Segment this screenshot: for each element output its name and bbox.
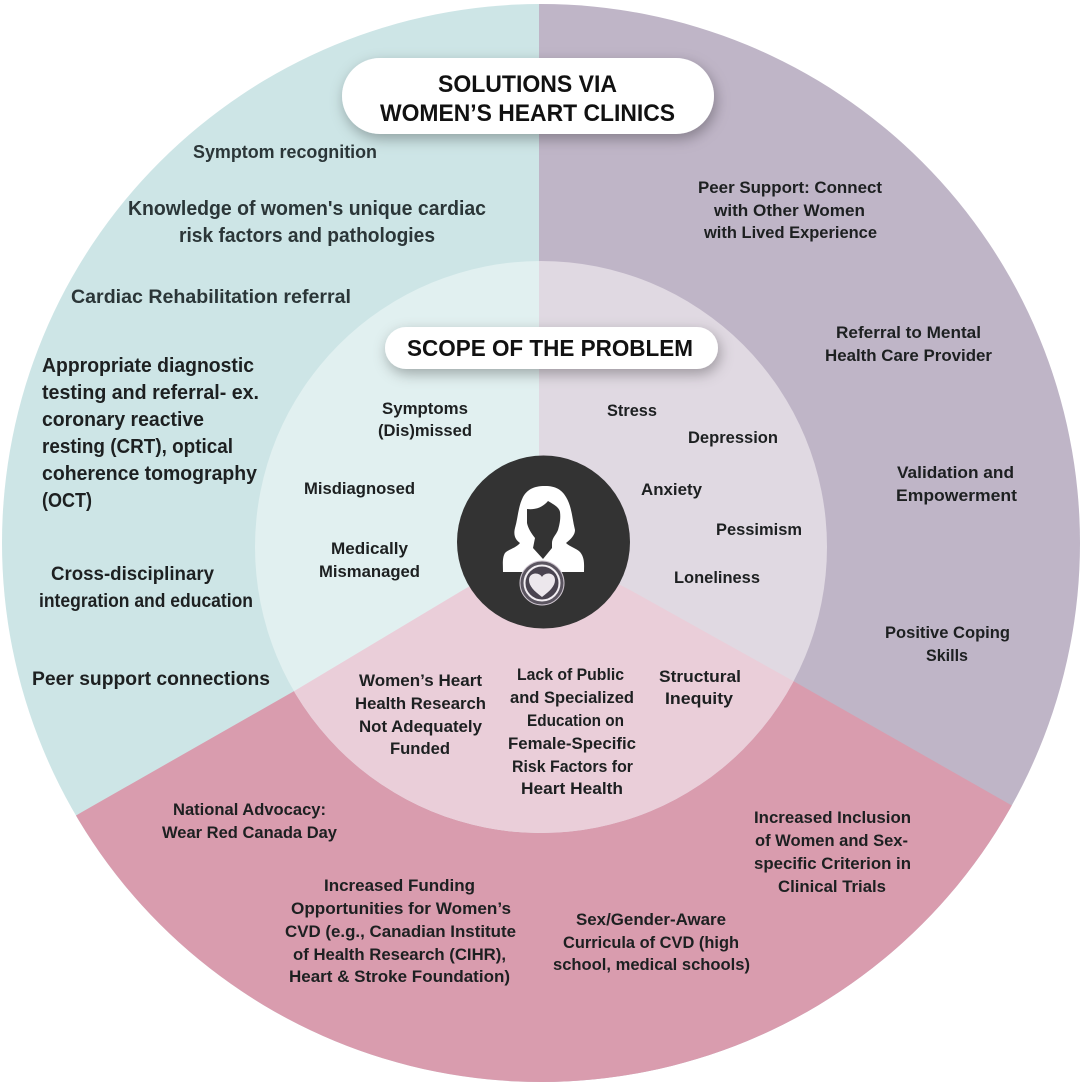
text: anxiety: Anxiety: [641, 481, 703, 499]
text: validation and empowerment: [896, 463, 1017, 505]
text: appropriate diagnostic testing: (OCT): [42, 490, 92, 512]
text: depression: Depression: [688, 429, 778, 447]
text: increased inclusion in clinical trials: of Women and Sex-: [755, 832, 908, 850]
text: appropriate diagnostic testing: Appropriate diagnostic: [42, 355, 254, 377]
icon: woman silhouette: [503, 486, 584, 572]
text: sex/gender-aware curricula: [553, 911, 750, 974]
text: loneliness: Loneliness: [674, 569, 760, 587]
text: lack of public and specialized education: Education on: [527, 712, 624, 730]
text: medically mismanaged: Mismanaged: [319, 563, 420, 581]
text: misdiagnosed: Misdiagnosed: [304, 480, 415, 498]
icon: heart badge: [520, 561, 564, 605]
text: research not adequately funded: Funded: [390, 740, 450, 758]
text: peer support lived experience: [698, 178, 882, 242]
text: pessimism: Pessimism: [716, 521, 802, 539]
text: symptoms dismissed: [378, 400, 472, 440]
icon: woman with heart badge: [457, 456, 630, 628]
text: lack of public and specialized education: Heart Health: [521, 780, 623, 798]
text: increased funding opportunities: Increased Funding: [324, 877, 475, 895]
panel: inner pink sector: [294, 584, 794, 833]
text: cross-disciplinary integration: [39, 564, 253, 612]
heading pill: scope of the problem: [385, 327, 718, 369]
heading pill: solutions via women's heart clinics: [342, 58, 714, 134]
text: research not adequately funded: Not Adequately: [359, 718, 483, 736]
text: increased funding opportunities: of Health Research (CIHR),: [293, 946, 506, 964]
panel: inner scope ring: [250, 255, 835, 840]
icon: face cutout: [527, 501, 560, 559]
text: national advocacy: [162, 801, 338, 842]
text: appropriate diagnostic testing: testing and referral- ex.: [42, 382, 259, 404]
text: medically mismanaged: Medically: [331, 540, 409, 558]
panel: outer teal medical sector: [0, 0, 539, 1085]
text: validation and empowerment: Empowerment: [896, 486, 1017, 505]
text: positive coping skills: Skills: [926, 646, 968, 665]
panel: inner purple sector: [539, 255, 832, 840]
text: peer support lived experience: with Other Women: [713, 201, 865, 220]
panel: inner teal sector: [250, 255, 539, 840]
text: positive coping skills: [885, 623, 1010, 665]
text: peer support lived experience: Peer Support: Connect: [698, 178, 882, 197]
text: peer support connections: Peer support connections: [32, 668, 270, 690]
text: symptom recognition: Symptom recognition: [193, 142, 377, 162]
text: lack of public and specialized education: and Specialized: [510, 689, 634, 707]
text: national advocacy: National Advocacy:: [173, 801, 326, 819]
text: increased funding opportunities: [285, 877, 516, 986]
text: referral to mental health: Referral to Mental: [836, 323, 981, 342]
text: appropriate diagnostic testing: [42, 355, 259, 512]
text: increased funding opportunities: Opportunities for Women’s: [291, 900, 511, 918]
text: increased inclusion in clinical trials: Increased Inclusion: [754, 809, 911, 827]
text: research not adequately funded: Health Research: [355, 695, 486, 713]
heading pill: solutions via women's heart clinics: SOLUTIONS VIA: [438, 71, 617, 98]
text: knowledge of unique risk factors: [128, 198, 486, 247]
text: research not adequately funded: [355, 672, 486, 758]
text: structural inequity: [659, 668, 741, 708]
text: increased funding opportunities: Heart & Stroke Foundation): [289, 968, 510, 986]
text: sex/gender-aware curricula: Sex/Gender-Aware: [576, 911, 726, 929]
text: appropriate diagnostic testing: resting (CRT), optical: [42, 436, 233, 458]
text: cross-disciplinary integration: integration and education: [39, 591, 253, 612]
text: sex/gender-aware curricula: Curricula of CVD (high: [563, 934, 739, 952]
text: referral to mental health: Health Care Provider: [825, 346, 992, 365]
text: increased funding opportunities: CVD (e.g., Canadian Institute: [285, 923, 516, 941]
heading pill: solutions via women's heart clinics: WOMEN’S HEART CLINICS: [380, 100, 675, 127]
heading pill: scope of the problem: SCOPE OF THE PROBLEM: [407, 335, 693, 361]
text: sex/gender-aware curricula: school, medical schools): [553, 956, 750, 974]
text: increased inclusion in clinical trials: [754, 809, 911, 896]
text: increased inclusion in clinical trials: Clinical Trials: [778, 878, 886, 896]
text: lack of public and specialized education: Female-Specific: [508, 735, 636, 753]
text: lack of public and specialized education: [508, 666, 636, 798]
text: positive coping skills: Positive Coping: [885, 623, 1010, 642]
text: increased inclusion in clinical trials: specific Criterion in: [754, 855, 911, 873]
text: national advocacy: Wear Red Canada Day: [162, 824, 338, 842]
panel: outer pink systemic sector: [76, 681, 1012, 1082]
text: structural inequity: Inequity: [665, 690, 734, 708]
panel: outer purple psychosocial sector: [539, 0, 1085, 1085]
text: referral to mental health: [825, 323, 992, 365]
text: cardiac rehabilitation referral: Cardiac Rehabilitation referral: [71, 287, 351, 308]
text: lack of public and specialized education: Risk Factors for: [512, 758, 634, 776]
text: medically mismanaged: [319, 540, 420, 581]
text: appropriate diagnostic testing: coronary reactive: [42, 409, 204, 431]
text: symptoms dismissed: Symptoms: [382, 400, 468, 418]
text: appropriate diagnostic testing: coherence tomography: [42, 463, 258, 485]
text: peer support lived experience: with Lived Experience: [703, 223, 877, 242]
text: cross-disciplinary integration: Cross-disciplinary: [51, 564, 214, 585]
text: validation and empowerment: Validation and: [897, 463, 1014, 482]
text: structural inequity: Structural: [659, 668, 741, 686]
text: research not adequately funded: Women’s Heart: [359, 672, 483, 690]
text: symptoms dismissed: (Dis)missed: [378, 422, 472, 440]
text: lack of public and specialized education: Lack of Public: [517, 666, 624, 684]
text: knowledge of unique risk factors: risk factors and pathologies: [179, 225, 435, 247]
text: knowledge of unique risk factors: Knowledge of women's unique cardiac: [128, 198, 486, 220]
text: stress: Stress: [607, 402, 657, 420]
